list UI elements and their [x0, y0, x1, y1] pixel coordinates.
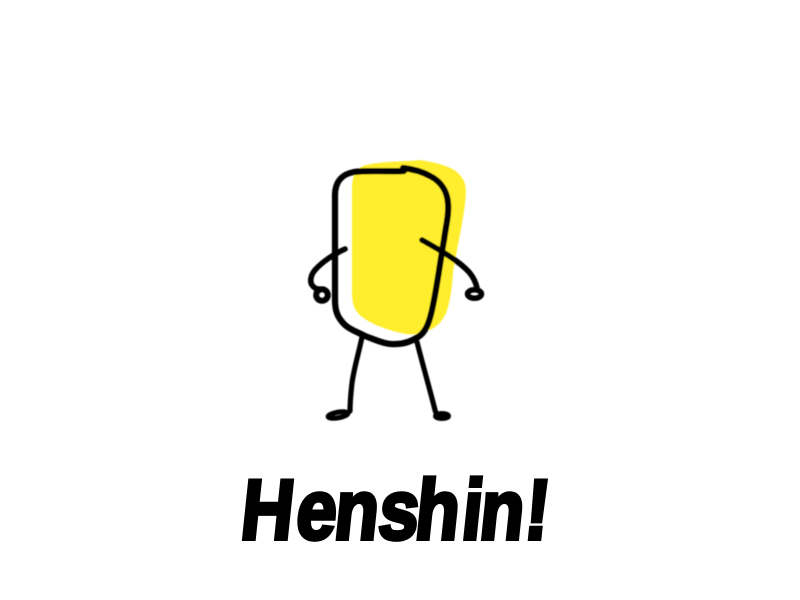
title: Henshin! — [237, 462, 555, 557]
right arm — [422, 240, 477, 288]
right leg — [417, 342, 442, 417]
left leg — [350, 337, 362, 411]
right foot — [436, 414, 448, 418]
yellow colour blob — [352, 160, 466, 334]
left foot — [328, 411, 348, 419]
left hand — [316, 289, 328, 301]
character figure — [311, 160, 482, 419]
left arm — [311, 249, 345, 289]
right hand — [468, 290, 482, 298]
body outline — [335, 168, 448, 344]
